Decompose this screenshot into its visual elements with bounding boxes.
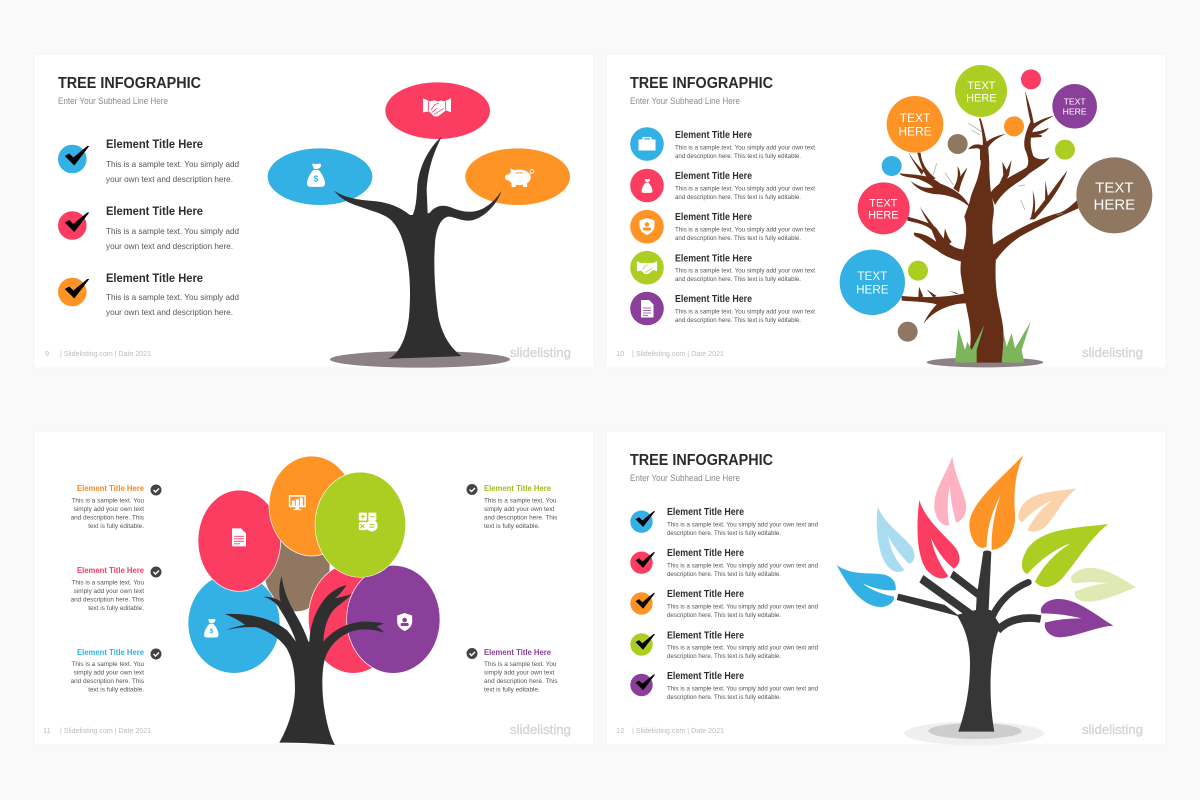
item 3: This is a sample text. You simply add: [106, 292, 239, 302]
icon: monitor chart: [289, 495, 306, 510]
circle labels: HERE: [966, 92, 997, 104]
dark tree: [897, 550, 1041, 732]
circles: [955, 65, 1007, 117]
right item 1: text is fully editable.: [484, 523, 540, 530]
right item 1: Element Title Here: [484, 483, 551, 493]
circle labels: TEXT: [1095, 180, 1133, 197]
leaf: purple: [1041, 599, 1113, 637]
right item 1: [466, 483, 557, 530]
right item 2: simply add your own text: [484, 670, 555, 676]
item 5: This is a sample text. You simply add your own text and: [667, 686, 818, 692]
item 1: This is a sample text. You simply add: [106, 159, 239, 169]
title: TREE INFOGRAPHIC: [630, 75, 773, 92]
left item 2: text is fully editable.: [88, 605, 144, 612]
circle labels: HERE: [1094, 196, 1135, 213]
subhead: Enter Your Subhead Line Here: [630, 96, 740, 107]
circle labels: TEXT: [900, 111, 931, 125]
title: TREE INFOGRAPHIC: [630, 452, 773, 469]
tree diagram with circles: [840, 65, 1152, 367]
left item 1: [71, 483, 162, 530]
icon: money bag: [204, 619, 219, 638]
item 3: [58, 271, 239, 317]
watermark: slidelisting: [510, 345, 571, 360]
right item 2: [466, 647, 557, 694]
circle labels: [856, 80, 1135, 296]
item 1: Element Title Here: [667, 507, 744, 518]
right item 1: This is a sample text. You: [484, 498, 557, 504]
item 2: [630, 169, 815, 202]
leaf: light blue: [877, 507, 915, 572]
right item 2: text is fully editable.: [484, 686, 540, 694]
footer: 10: [616, 349, 624, 358]
item 1: [630, 507, 818, 537]
title: TREE INFOGRAPHIC: [58, 75, 201, 92]
item 2: and description here. This text is fully editable.: [675, 194, 801, 201]
footer: 11: [43, 726, 51, 735]
right item 2: and description here. This: [484, 678, 557, 685]
circle labels: TEXT: [1064, 97, 1086, 107]
icon: handshake: [423, 98, 451, 116]
circle labels: HERE: [868, 209, 899, 221]
item 2: [630, 548, 818, 578]
item 2: description here. This text is fully editable.: [667, 571, 781, 578]
footer: | Slidelisting.com | Date 2021: [60, 349, 151, 358]
item 2: Element Title Here: [675, 171, 752, 182]
icon: shield: [397, 613, 412, 631]
right item 1: and description here. This: [484, 514, 557, 522]
left item 3: simply add your own text: [74, 670, 144, 676]
item 5: Element Title Here: [667, 671, 744, 682]
icon: money bag: $: [314, 174, 319, 183]
tree diagram with overlapping ovals: [188, 456, 440, 745]
left item 1: and description here. This: [71, 514, 144, 522]
item 4: Element Title Here: [675, 254, 752, 264]
left item 3: [71, 647, 162, 694]
item 5: Element Title Here: [675, 294, 752, 305]
item 4: [630, 251, 815, 284]
circle labels: HERE: [1063, 106, 1087, 116]
item 5: [630, 292, 815, 325]
right item 2: This is a sample text. You: [484, 661, 557, 668]
item 1: your own text and description here.: [106, 174, 233, 184]
footer: | Slidelisting.com | Date 2021: [632, 349, 724, 358]
leaf: orange: [969, 455, 1023, 550]
item 4: This is a sample text. You simply add your own text and: [667, 644, 818, 652]
item 3: your own text and description here.: [106, 307, 233, 317]
circle labels: HERE: [898, 125, 932, 139]
right item 1: simply add your own text: [484, 506, 555, 513]
right item 2: Element Title Here: [484, 647, 551, 657]
panel: slide 10: [606, 54, 1166, 368]
left item 2: [71, 565, 162, 612]
item 3: This is a sample text. You simply add your own text: [675, 226, 815, 234]
left item 1: simply add your own text: [74, 506, 144, 513]
item 3: Element Title Here: [106, 271, 203, 285]
left item 1: text is fully editable.: [88, 523, 144, 530]
circle labels: HERE: [856, 283, 889, 296]
leaf: green: [1022, 524, 1108, 587]
item 3: Element Title Here: [667, 589, 744, 600]
left item 1: This is a sample text. You: [72, 498, 144, 504]
dark tree: [225, 576, 384, 745]
item 1: and description here. This text is fully editable.: [675, 153, 801, 160]
item 3: [630, 589, 818, 619]
left item 3: text is fully editable.: [88, 686, 144, 694]
item 2: Element Title Here: [667, 548, 744, 559]
subhead: Enter Your Subhead Line Here: [630, 473, 740, 484]
watermark: slidelisting: [1082, 345, 1143, 360]
item 1: [630, 127, 815, 161]
leaf: pink: [934, 457, 966, 525]
panel: slide 9: [34, 54, 594, 368]
leaf: peach: [1018, 488, 1077, 532]
leaf: red: [917, 500, 959, 578]
left item 2: and description here. This: [71, 596, 144, 604]
icon: piggy bank: [505, 168, 534, 187]
item 1: This is a sample text. You simply add your own text: [675, 144, 815, 152]
footer: 9: [45, 349, 49, 358]
watermark: slidelisting: [1082, 722, 1143, 737]
icon: money bag: [307, 163, 325, 187]
left item 1: Element Title Here: [77, 483, 144, 493]
item 4: This is a sample text. You simply add your own text: [675, 268, 815, 274]
item 2: This is a sample text. You simply add your own text and: [667, 562, 818, 570]
item 1: Element Title Here: [675, 130, 752, 141]
icon: document: [232, 528, 246, 546]
left item 3: This is a sample text. You: [72, 661, 144, 668]
leaf: light green: [1071, 568, 1136, 602]
tree trunk and branches: [899, 91, 1078, 363]
leaf: blue: [837, 565, 896, 607]
item 3: This is a sample text. You simply add your own text and: [667, 604, 818, 610]
item 1: [58, 137, 239, 184]
icon: calculator: [359, 513, 378, 531]
item 2: This is a sample text. You simply add your own text: [675, 186, 815, 192]
footer: 12: [616, 726, 624, 735]
item 3: [630, 210, 815, 244]
item 4: and description here. This text is fully editable.: [675, 276, 801, 283]
panel: slide 12: [606, 431, 1166, 745]
circle labels: TEXT: [967, 80, 996, 92]
item 5: and description here. This text is fully editable.: [675, 317, 801, 324]
item 4: description here. This text is fully editable.: [667, 653, 781, 660]
item 4: [630, 630, 818, 660]
item 3: and description here. This text is fully editable.: [675, 235, 801, 242]
circle labels: TEXT: [869, 197, 898, 209]
left item 3: and description here. This: [71, 678, 144, 685]
watermark: slidelisting: [510, 722, 571, 737]
item 3: Element Title Here: [675, 212, 752, 223]
item 2: Element Title Here: [106, 204, 203, 218]
item 2: [58, 204, 239, 251]
panel: slide 11: [34, 431, 594, 745]
grass: [955, 322, 1031, 363]
circle labels: TEXT: [857, 270, 887, 283]
footer: | Slidelisting.com | Date 2021: [60, 726, 151, 735]
left item 2: Element Title Here: [77, 565, 144, 575]
item 5: This is a sample text. You simply add your own text: [675, 308, 815, 316]
left item 3: Element Title Here: [77, 647, 144, 657]
item 2: This is a sample text. You simply add: [106, 226, 239, 236]
item 1: description here. This text is fully editable.: [667, 530, 781, 537]
tree diagram with leaves: [837, 455, 1136, 745]
item 4: Element Title Here: [667, 630, 744, 642]
item 5: [630, 671, 818, 701]
item 2: your own text and description here.: [106, 241, 233, 251]
subhead: Enter Your Subhead Line Here: [58, 96, 168, 107]
item 5: description here. This text is fully editable.: [667, 694, 781, 701]
footer: | Slidelisting.com | Date 2021: [632, 726, 724, 735]
item 1: This is a sample text. You simply add your own text and: [667, 522, 818, 528]
left item 2: This is a sample text. You: [72, 580, 144, 586]
tree diagram with ovals: [268, 82, 570, 368]
icon: money bag: $: [210, 628, 214, 635]
item 1: Element Title Here: [106, 137, 203, 151]
left item 2: simply add your own text: [74, 588, 144, 595]
item 3: description here. This text is fully editable.: [667, 612, 781, 619]
